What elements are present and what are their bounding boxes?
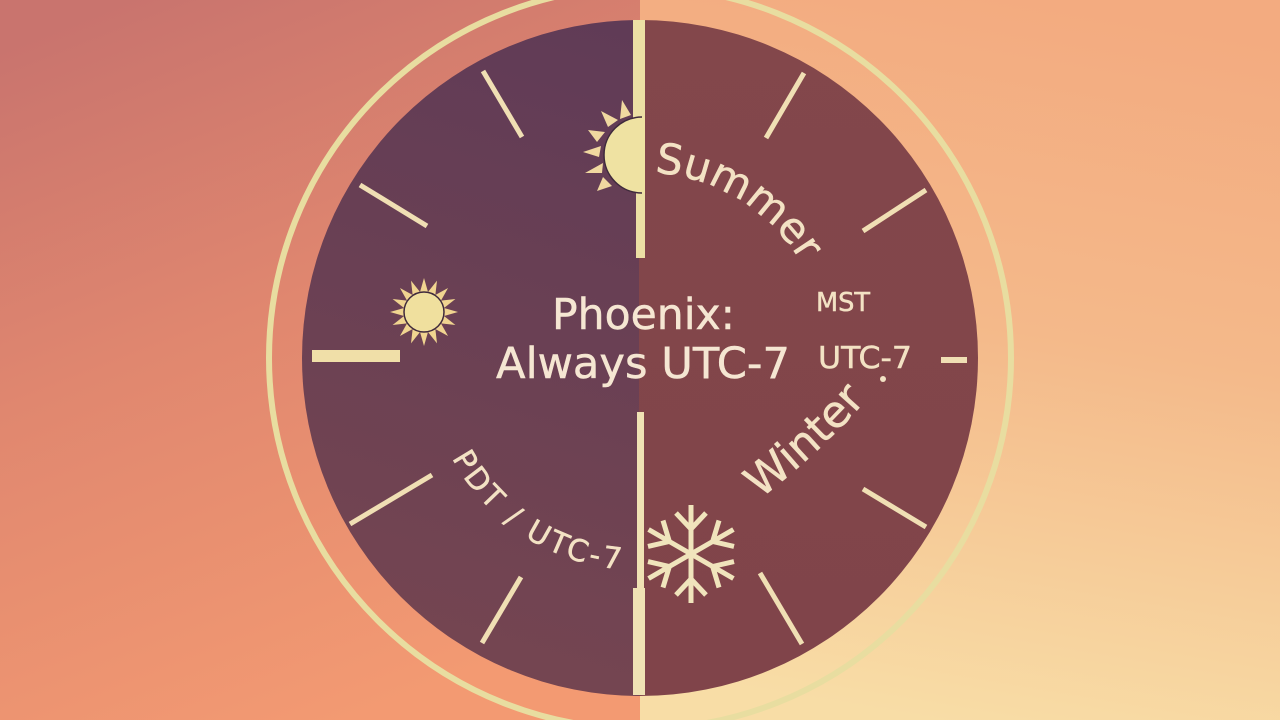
clock face bbox=[302, 20, 978, 696]
title: Phoenix: bbox=[552, 290, 735, 340]
icon: small sun bbox=[390, 278, 458, 346]
clock face: left half bbox=[302, 20, 639, 696]
label: MST: MST bbox=[816, 288, 870, 318]
center divider: top bbox=[633, 20, 645, 258]
icon: half sun at top bbox=[583, 100, 645, 193]
background: left half bbox=[0, 0, 640, 720]
background: right half bbox=[640, 0, 1280, 720]
center divider: bottom bbox=[633, 412, 645, 695]
clock tick marks bbox=[312, 71, 967, 644]
mark: dot near Winter bbox=[880, 376, 886, 382]
label: UTC-7: UTC-7 bbox=[818, 341, 912, 376]
title bbox=[496, 290, 790, 389]
icon: snowflake bbox=[641, 505, 741, 603]
label: Winter: Winter bbox=[740, 384, 860, 494]
clock face: right half bbox=[639, 20, 978, 696]
title: Always UTC-7 bbox=[496, 339, 790, 389]
label: Summer: Summer bbox=[657, 142, 821, 254]
outer ring bbox=[269, 0, 1011, 720]
label: PDT / UTC-7: PDT / UTC-7 bbox=[453, 448, 621, 568]
